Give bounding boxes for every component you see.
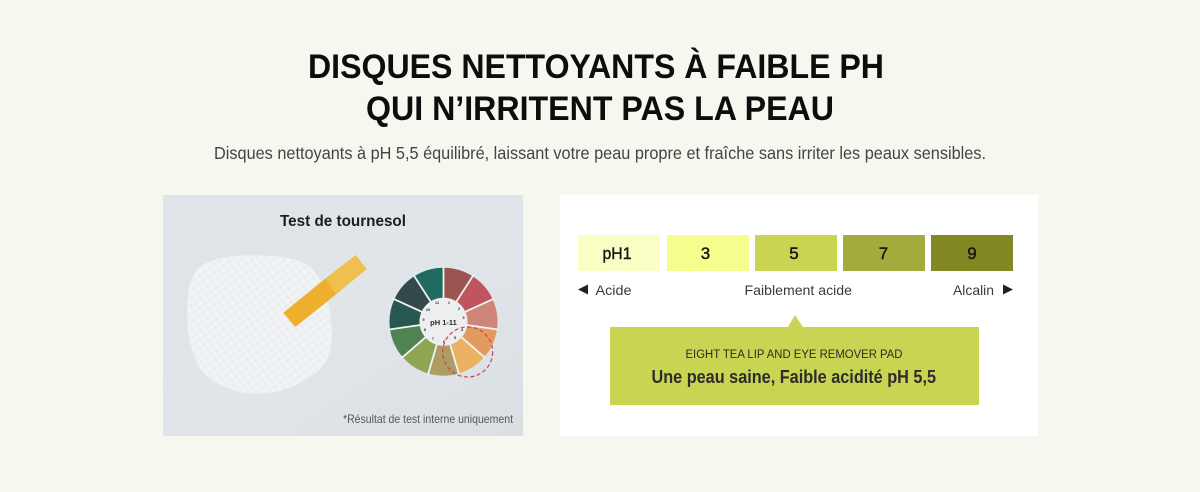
pH colour wheel: 4 — [461, 327, 464, 332]
callout: Une peau saine, Faible acidité pH 5,5 — [652, 367, 936, 387]
scale labels — [578, 282, 1013, 298]
pH scale bars: 7 — [879, 244, 888, 263]
pH colour wheel — [388, 266, 499, 377]
pH colour wheel: 10 — [426, 307, 431, 312]
icon: right arrow — [1003, 284, 1013, 294]
pH colour wheel: 3 — [462, 315, 465, 320]
pH scale bars: 5 — [789, 244, 799, 263]
pH scale bars — [578, 235, 1013, 271]
callout: EIGHT TEA LIP AND EYE REMOVER PAD — [686, 349, 902, 361]
panel: litmus test photo — [163, 195, 523, 436]
photo heading: Test de tournesol — [280, 213, 406, 230]
pH colour wheel: pH 1-11 — [430, 318, 457, 327]
litmus strip — [283, 255, 367, 327]
dashed highlight circle — [443, 327, 493, 377]
pH colour wheel: 11 — [435, 300, 440, 305]
panel: pH scale — [560, 195, 1038, 436]
pH colour wheel: 1 — [448, 300, 451, 305]
pH colour wheel: 5 — [454, 335, 457, 340]
scale labels: Alcalin — [953, 282, 994, 298]
callout — [610, 315, 979, 405]
pH colour wheel: 9 — [422, 317, 425, 322]
subtitle: Disques nettoyants à pH 5,5 équilibré, laissant votre peau propre et fraîche sans irriter les peaux sensibles. — [214, 143, 986, 163]
pH scale bars: 9 — [967, 244, 977, 263]
title — [308, 48, 884, 128]
cleansing pad — [188, 256, 331, 393]
pH colour wheel: 6 — [443, 339, 446, 344]
title: DISQUES NETTOYANTS À FAIBLE PH — [308, 48, 884, 86]
scale labels: Acide — [596, 282, 632, 298]
pH scale bars: 3 — [701, 244, 710, 263]
pH scale bars: pH1 — [602, 244, 632, 263]
pH colour wheel: 2 — [458, 306, 461, 311]
scale labels: Faiblement acide — [744, 282, 852, 298]
title: QUI N’IRRITENT PAS LA PEAU — [366, 90, 834, 128]
pH colour wheel: 7 — [432, 336, 435, 341]
disclaimer: *Résultat de test interne uniquement — [343, 412, 514, 426]
pH colour wheel: 8 — [424, 327, 427, 332]
icon: left arrow — [578, 284, 588, 294]
